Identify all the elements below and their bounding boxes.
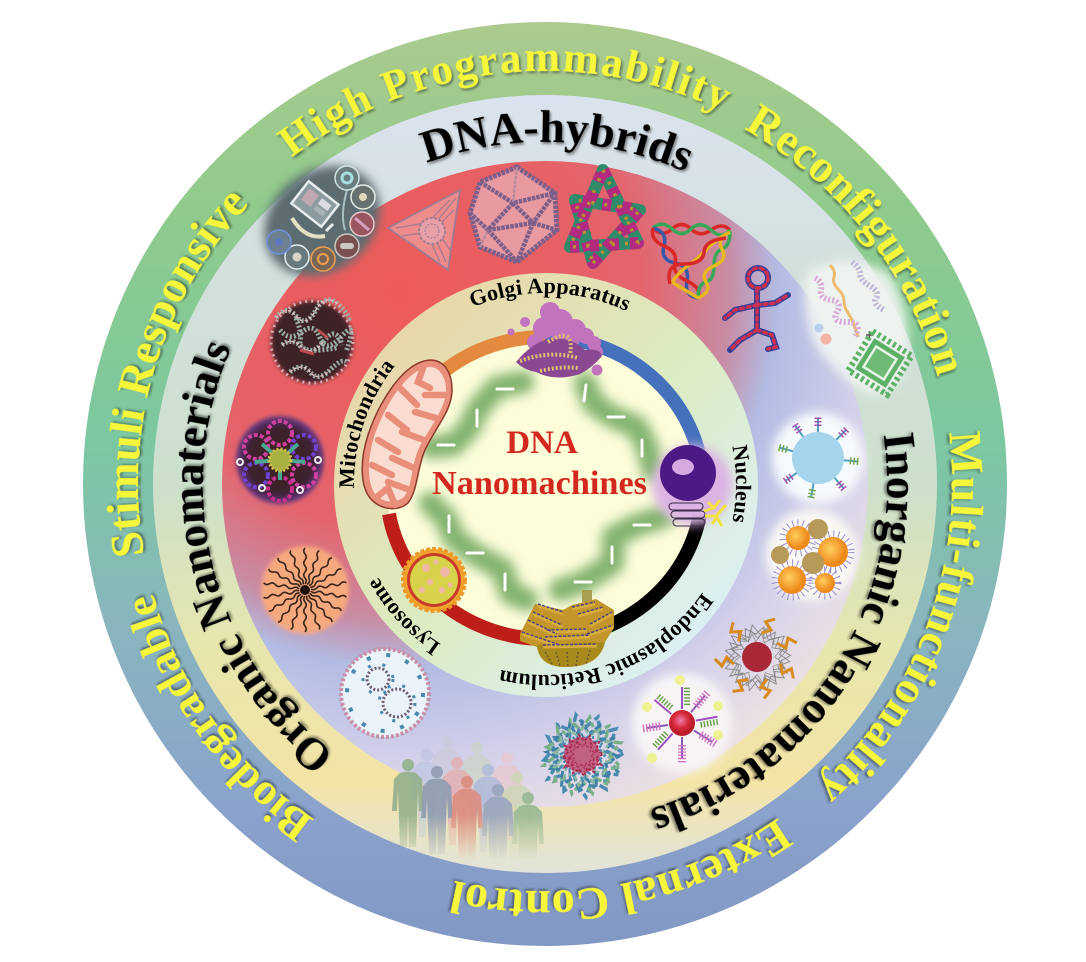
outer label: External Control: External Control bbox=[448, 816, 794, 920]
icon: DNA star lattice bbox=[570, 170, 640, 263]
icon: DNA tetrahedron wireframe bbox=[652, 224, 730, 298]
heading: DNA-hybrids: DNA-hybrids bbox=[418, 110, 694, 174]
icon: endoplasmic reticulum bbox=[520, 590, 614, 667]
center title bbox=[432, 425, 647, 502]
icon: dark DNA network bbox=[271, 300, 353, 383]
icon: vesicle with nested liposomes bbox=[341, 649, 429, 737]
icon: red core with polymer strands bbox=[715, 616, 797, 699]
icon: DNA stick figure bbox=[725, 268, 788, 350]
icon: DNA origami icosahedron bbox=[470, 167, 557, 262]
icon: group of people bbox=[392, 736, 544, 856]
icon: DNA plus chip bbox=[805, 262, 912, 395]
label: Golgi Apparatus: Golgi Apparatus bbox=[470, 278, 630, 310]
panel: nanostructure gallery ring bbox=[222, 143, 912, 880]
label: Lysosome: Lysosome bbox=[370, 578, 440, 656]
outer label: Biodegradable: Biodegradable bbox=[130, 592, 316, 843]
colored organelle ring bbox=[389, 337, 703, 639]
panel: central core bbox=[362, 302, 732, 667]
icon: nucleus with ER and antibody bbox=[652, 445, 732, 526]
heading: Organic Nanomaterials: Organic Nanomaterials bbox=[178, 339, 331, 770]
label: Nucleus: Nucleus bbox=[732, 444, 752, 522]
icon: grey circuit diagram bbox=[242, 143, 402, 299]
icon: orange micelle with spokes bbox=[261, 546, 349, 634]
label: Endoplasmic Reticulum: Endoplasmic Reticulum bbox=[500, 592, 714, 690]
panel: subcellular targets disc bbox=[334, 273, 758, 697]
outer label: Multi-functionality: Multi-functionality bbox=[818, 430, 984, 804]
icon: protein corona nanoparticle bbox=[534, 707, 632, 806]
label: Mitochondria: Mitochondria bbox=[339, 362, 395, 488]
center title: Nanomachines bbox=[432, 465, 647, 502]
icon: spherical nucleic acid bbox=[632, 673, 732, 773]
heading: Inorganic Nanomaterials: Inorganic Nanomaterials bbox=[648, 432, 915, 834]
center title: DNA bbox=[506, 425, 578, 461]
icon: Golgi apparatus bbox=[508, 302, 603, 378]
icon: lysosome bbox=[403, 549, 465, 611]
outer label: Reconfiguration: Reconfiguration bbox=[743, 103, 958, 380]
icon: dark flower DNA nanostructure bbox=[236, 416, 324, 504]
DNA helix wreath bbox=[430, 382, 663, 600]
icon: DNA origami tetrahedron bbox=[388, 190, 460, 270]
icon: gold nanoparticle assembly bbox=[766, 509, 858, 601]
outer label: High Programmability: High Programmability bbox=[276, 49, 734, 160]
outer label: Stimuli Responsive: Stimuli Responsive bbox=[106, 191, 251, 556]
icon: hairpin nanoparticle bbox=[772, 412, 864, 504]
icon: mitochondrion bbox=[362, 360, 452, 509]
panel: material classes ring bbox=[153, 95, 937, 873]
